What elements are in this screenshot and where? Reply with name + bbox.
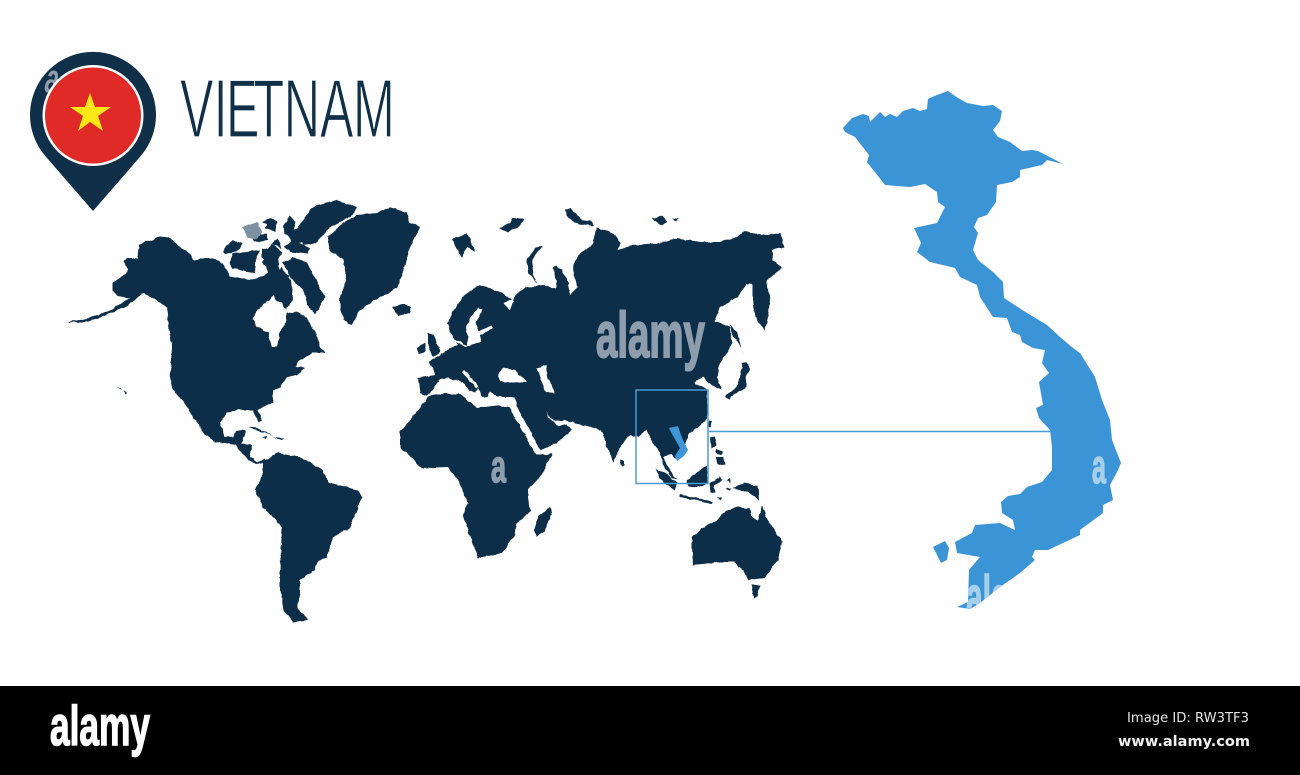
Severnaya Zemlya (565, 208, 594, 226)
Novaya Zemlya (527, 247, 543, 284)
Melville island faded (242, 222, 262, 240)
Java (680, 494, 713, 504)
watermark: pin: a (41, 55, 65, 104)
Franz Josef Land (499, 218, 525, 232)
Adriatic sea (463, 371, 477, 387)
Africa (400, 394, 553, 558)
enlarged Vietnam map (843, 91, 1121, 609)
Indonesian islets (717, 478, 732, 500)
Baltic sea (466, 307, 493, 346)
Sri Lanka (620, 459, 624, 467)
Borneo (687, 465, 708, 488)
Danish straits (450, 338, 466, 346)
Phu Quoc island (933, 541, 949, 563)
image id: Image ID: RW3TF3 (1127, 710, 1249, 726)
Tasmania (752, 585, 760, 598)
New Siberian Islands (653, 216, 679, 226)
watermark: main: alamy (596, 300, 705, 372)
Greenland (327, 207, 420, 325)
title: VIETNAM (180, 62, 395, 155)
Hawaii (117, 387, 127, 395)
website: www.alamy.com (1118, 734, 1250, 750)
footer bar (0, 686, 1300, 775)
Arctic archipelago (223, 200, 357, 314)
watermark: Africa: a (491, 441, 506, 492)
world map (65, 200, 785, 622)
Sulawesi (709, 477, 722, 493)
Sakhalin (730, 325, 743, 355)
Sumatra (655, 468, 677, 490)
map pin with flag (30, 52, 156, 211)
Caspian sea (537, 365, 555, 393)
watermark: Vietnam: a (1092, 440, 1106, 494)
Cuba and Caribbean (248, 427, 284, 440)
Hainan and Taiwan (683, 420, 712, 438)
Madagascar (534, 507, 552, 537)
Philippines (710, 436, 726, 465)
connector line (708, 430, 1050, 432)
Britain (428, 333, 440, 357)
Eurasia (418, 228, 785, 480)
Baja gulf (181, 401, 194, 425)
Ireland (417, 343, 425, 354)
highlighted Vietnam on world map (669, 426, 688, 461)
watermark: south Vietnam: ala (966, 565, 1008, 632)
South America (255, 453, 362, 622)
North America (65, 237, 325, 464)
locator box (636, 390, 708, 484)
footer logo: alamy (50, 695, 150, 757)
flag star (70, 93, 111, 131)
Black sea (498, 368, 527, 383)
Svalbard (452, 233, 475, 258)
Iceland (392, 304, 412, 316)
Australia (692, 505, 782, 580)
Japan (725, 362, 750, 400)
New Guinea (733, 483, 759, 500)
